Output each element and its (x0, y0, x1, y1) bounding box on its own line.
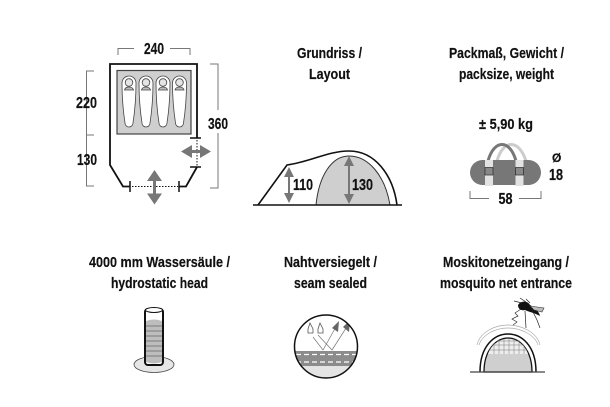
dimension: width 240 (118, 41, 190, 58)
panel: pack bag (470, 116, 563, 208)
panel: tent side profile (253, 151, 402, 205)
inner tent with sleeping bags (117, 70, 191, 134)
door ticks and dotted openings (130, 138, 201, 192)
bag straps (485, 160, 524, 186)
bag handles (488, 144, 526, 161)
icon: mosquito net tent (470, 298, 545, 372)
dimension: diameter 18: 18 (549, 167, 563, 184)
dimension: 220 and 130: 130 (77, 152, 97, 169)
dimension: length 360: 360 (208, 116, 228, 133)
weight: ± 5,90 kg (479, 116, 533, 133)
heading: Nahtversiegelt: Nahtversiegelt / (284, 254, 378, 271)
sleeping bags (122, 76, 186, 127)
heading: Nahtversiegelt (284, 254, 378, 292)
heading: Grundriss / Layout (297, 45, 363, 83)
label 130: 130 (352, 177, 373, 194)
tent shell (258, 151, 397, 205)
dimension: diameter 18: Ø (552, 151, 561, 165)
arrow: side door (181, 145, 211, 158)
panel: floor plan (76, 41, 228, 204)
heading: Packmaß, Gewicht (449, 45, 565, 83)
heading: Wassersäule (89, 254, 231, 292)
heading: Wassersäule: hydrostatic head (111, 275, 208, 292)
icon: water column (134, 308, 174, 372)
label 110: 110 (293, 177, 313, 194)
mesh net (488, 339, 528, 354)
dimension: length 360 (208, 64, 228, 188)
tent dome (480, 334, 536, 372)
inner tent (316, 156, 390, 205)
ground line (253, 204, 402, 206)
heading: Moskitonetzeingang (440, 254, 572, 292)
bag body (470, 160, 541, 185)
signal arcs (477, 325, 540, 345)
heading: Nahtversiegelt: seam sealed (294, 275, 367, 292)
heading: Moskitonetzeingang: Moskitonetzeingang / (443, 254, 570, 271)
arrow: 110 height (284, 167, 294, 203)
heading: Grundriss / Layout: Grundriss / (297, 45, 363, 62)
icon: seam sealed (290, 315, 362, 380)
dimension: 220 and 130: 220 (76, 95, 97, 112)
heading: Packmaß, Gewicht: packsize, weight (459, 66, 554, 83)
heading: Packmaß, Gewicht: Packmaß, Gewicht / (449, 45, 565, 62)
mosquito (512, 298, 544, 328)
ground (470, 371, 545, 373)
arrow: front door (147, 170, 162, 204)
dimension: diameter 18 (549, 151, 563, 184)
dimension: 220 and 130 (76, 71, 97, 186)
dimension: width 240: 240 (144, 41, 164, 58)
heading: Grundriss / Layout: Layout (309, 66, 350, 83)
arrow: 130 height (344, 156, 354, 204)
heading: Wassersäule: 4000 mm Wassersäule / (89, 254, 231, 271)
heading: Moskitonetzeingang: mosquito net entrance (440, 275, 572, 292)
tent outline (110, 64, 197, 186)
dimension: 58: 58 (498, 191, 513, 208)
